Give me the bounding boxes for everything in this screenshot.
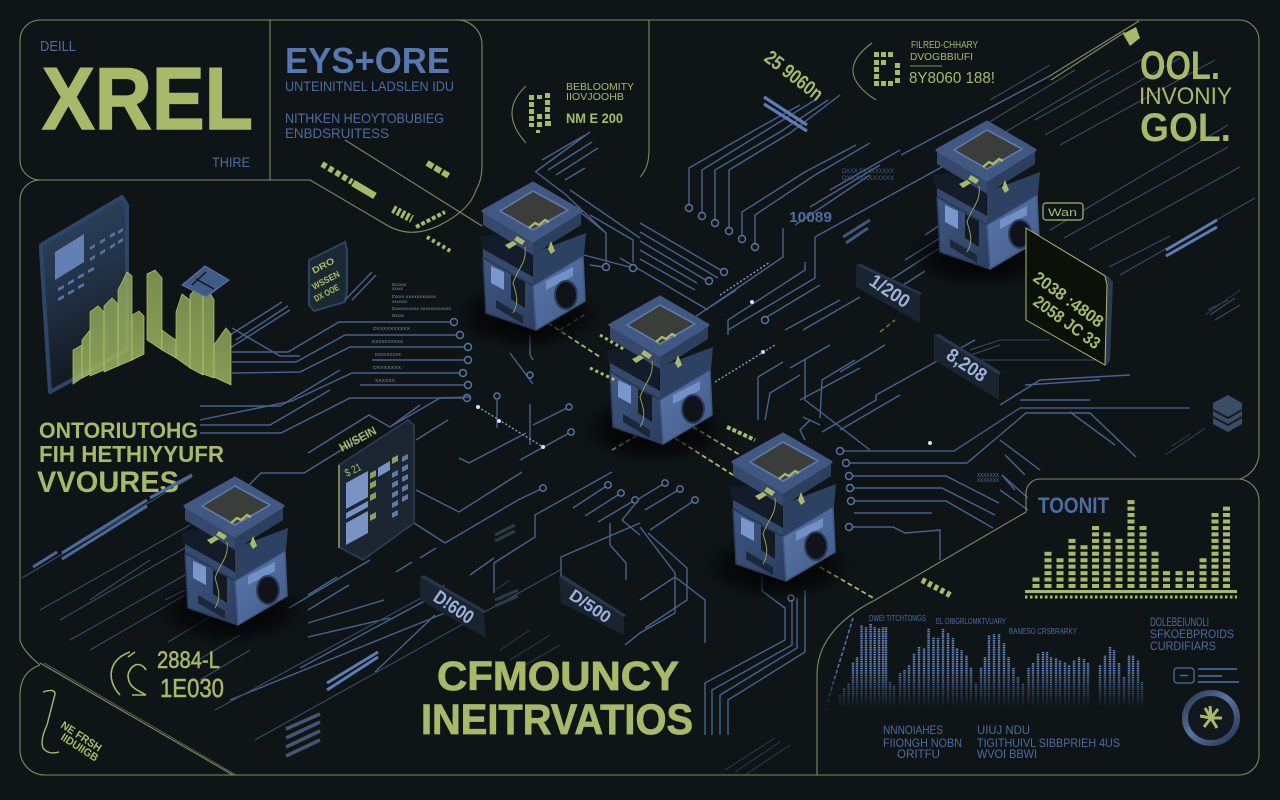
callout text: FILRED-CHHARY (911, 40, 978, 51)
small outlined tag (1043, 203, 1083, 220)
sparkle dotted path (476, 262, 932, 449)
tiny list labels: Dxxx xxxxxxxxxxx (392, 294, 437, 299)
minus box legend (1174, 668, 1239, 683)
traces: right of cube three (960, 55, 1255, 360)
middle line: INVONIY (1139, 83, 1232, 110)
value tile: lower left: D!600 (429, 587, 477, 629)
tiny list labels: DXXXXXXXX (375, 352, 401, 357)
chart title: TOONIT (1038, 493, 1109, 518)
flag arrow (1048, 21, 1140, 80)
left green heading: FIH HETHIYYUFR (39, 441, 224, 467)
bottom-left bracket note (42, 690, 104, 764)
stripe block bottom (286, 220, 870, 756)
histogram labels: EL OIBGRLOMKTVUARY (936, 617, 1007, 626)
card text: WSSEN (310, 269, 341, 292)
traces: left chart rows (200, 302, 472, 433)
tiny list labels: XXXXXXX (977, 478, 1000, 484)
circular gauge icon (1185, 693, 1237, 743)
value tile: lower centre (559, 575, 626, 635)
eyebrow label: DEILL (40, 38, 76, 55)
card text: DRO (310, 256, 336, 276)
slanted note text: IIDUIIGB (58, 731, 100, 764)
bottom line: GOL. (1140, 106, 1231, 150)
tiny list labels: DXXXXXXX (373, 365, 401, 370)
traces: faint bottom lines (495, 290, 1240, 775)
axis ticks (1025, 596, 1237, 598)
slanted note text: NE FRSH (58, 719, 104, 755)
tiny list labels: Dxxxx (392, 313, 405, 318)
bottom blue text columns: NNNOIAHES (883, 723, 943, 737)
cube node one (450, 183, 606, 351)
isometric green bars (73, 270, 231, 385)
value tile: right (934, 334, 1001, 400)
right side note: CURDIFIARS (1150, 639, 1216, 653)
traces: above cube one (494, 132, 728, 445)
callout text (566, 82, 634, 126)
callout text: NM E 200 (566, 110, 623, 126)
card text (310, 256, 341, 304)
data text: 2058 JC 33 (1030, 292, 1104, 353)
tiny list labels: Dxxxxxxxxx xxxxxxxxxxxx (392, 306, 452, 311)
value tile: right: 8,208 (942, 345, 990, 387)
bottom blue text columns: TIGITHUIVL SIBBPRIEH 4US (977, 736, 1120, 750)
left green heading (37, 418, 224, 499)
bottom blue text columns: UIUJ NDU (977, 723, 1030, 737)
green dashed connectors (548, 315, 895, 599)
cube node three (904, 122, 1060, 290)
floating small chip (182, 266, 229, 297)
bottom blue text columns: WVOI BBWI (977, 747, 1037, 761)
number lines: 1E030 (160, 673, 224, 703)
bottom centre heading: CFMOUNCY (437, 653, 679, 699)
tiny list labels (372, 169, 1000, 484)
icon: pixel block (529, 93, 551, 133)
blue heading block (285, 40, 454, 141)
icon: headset (111, 652, 146, 695)
tiny list labels: XXXXXX (375, 378, 395, 383)
callout text: BEBLOOMITY (566, 82, 634, 93)
card text: DX OOE (312, 282, 341, 304)
value tile: lower left (420, 575, 486, 638)
traces: right of cube four (836, 375, 1190, 560)
number lines (157, 647, 224, 703)
callout text: 8Y8060 188! (909, 70, 995, 87)
tiny list labels: DXXXXXXXXX (372, 339, 403, 344)
histogram labels: BANESO CRSBRARKY (1009, 627, 1078, 636)
tiny list labels: XXXXXXX (977, 473, 1000, 479)
tablet content blocks (346, 461, 390, 545)
blue body text (285, 110, 444, 141)
top right heading (1139, 44, 1232, 150)
device screen (55, 234, 84, 280)
callout: top right of centre (853, 40, 995, 100)
tiny list labels: DXXXXXXXXXXX (842, 176, 894, 182)
tiny list labels: Dxxxxx (392, 282, 407, 287)
dashed axis (825, 618, 853, 710)
bars (840, 624, 1142, 706)
callout text: IIOVJOOHB (566, 92, 624, 103)
tiny list labels: xxxxx (392, 286, 404, 291)
small outlined tag: Wan (1048, 207, 1077, 219)
traces: top centre with rings (686, 77, 1048, 335)
tablet keys (392, 454, 408, 518)
callout text (909, 40, 995, 87)
tablet heading: HI/SEIN (337, 424, 379, 455)
device keypad dots (58, 228, 123, 301)
axis baseline (1025, 590, 1237, 593)
histogram labels: DWEI TITCHTOMGS (869, 614, 926, 623)
tiny list labels: DXXX DXXXXXXXX (842, 169, 894, 175)
tiny list labels: DXXXXXXXXXX (373, 326, 410, 331)
equalizer bars (1036, 499, 1226, 588)
value tile: upper right: 1/200 (865, 271, 913, 313)
bottom blue text columns: ORITFU (897, 747, 940, 761)
number lines: 2884-L (157, 647, 220, 674)
traces: faint lines around cube five (22, 477, 560, 740)
traces: centre lower (230, 340, 975, 735)
blue body text: NITHKEN HEOYTOBUBIEG (285, 110, 444, 126)
right side note (1150, 615, 1234, 653)
bottom blue text columns (883, 723, 1120, 761)
green data panel (1026, 228, 1113, 365)
blue heading: EYS+ORE (285, 40, 450, 81)
bottom blue text columns: FIIONGH NOBN (883, 736, 962, 750)
left green heading: ONTORIUTOHG (39, 418, 198, 443)
green isometric blocks (322, 163, 952, 596)
cube node two (577, 297, 733, 465)
icon: pixel block (874, 52, 900, 86)
right side note: DOLEBEIUNOLI (1150, 615, 1209, 629)
device slab (41, 197, 127, 392)
data text: 2038 :4808 (1030, 268, 1107, 331)
main title: XREL (42, 49, 253, 148)
blue stripes right (1166, 220, 1217, 256)
bottom centre heading (421, 653, 693, 744)
panel: blue histogram (825, 614, 1150, 710)
tiny list labels: xxxxxxx (392, 299, 408, 304)
blue body text: ENBDSRUITESS (285, 125, 389, 141)
blue stripes (764, 97, 807, 131)
value tile: upper right (856, 264, 922, 323)
small label: THIRE (212, 154, 250, 170)
left bar chart device (41, 197, 231, 392)
callout: top centre (512, 82, 634, 143)
tablet panel (337, 420, 414, 560)
panel: equalizer chart (1025, 493, 1237, 597)
callout text: DVOGBBIUFI (910, 52, 973, 63)
histogram labels (869, 614, 1078, 636)
callout: slanted green label: 25 9060n (760, 47, 827, 106)
tablet glyphs: $ 21 (343, 461, 364, 480)
top right heading: OOL. (1140, 44, 1220, 88)
server stack icon (1213, 395, 1242, 432)
left green heading: VVOURES (37, 466, 179, 499)
number label: 10089 (789, 209, 832, 226)
headset icon and numbers (111, 647, 224, 703)
title block (40, 38, 253, 170)
value tile: lower centre: D/500 (566, 586, 615, 627)
arc (853, 43, 876, 100)
small green display card (309, 242, 376, 311)
arc (512, 86, 526, 143)
cube node four (700, 434, 856, 602)
bottom centre heading: INEITRVATIOS (421, 696, 693, 744)
blue subheading: UNTEINITNEL LADSLEN IDU (285, 78, 454, 94)
cube node five (152, 478, 308, 646)
blue slanted stripes left (33, 475, 192, 567)
right side note: SFKOEBPROIDS (1150, 627, 1234, 641)
